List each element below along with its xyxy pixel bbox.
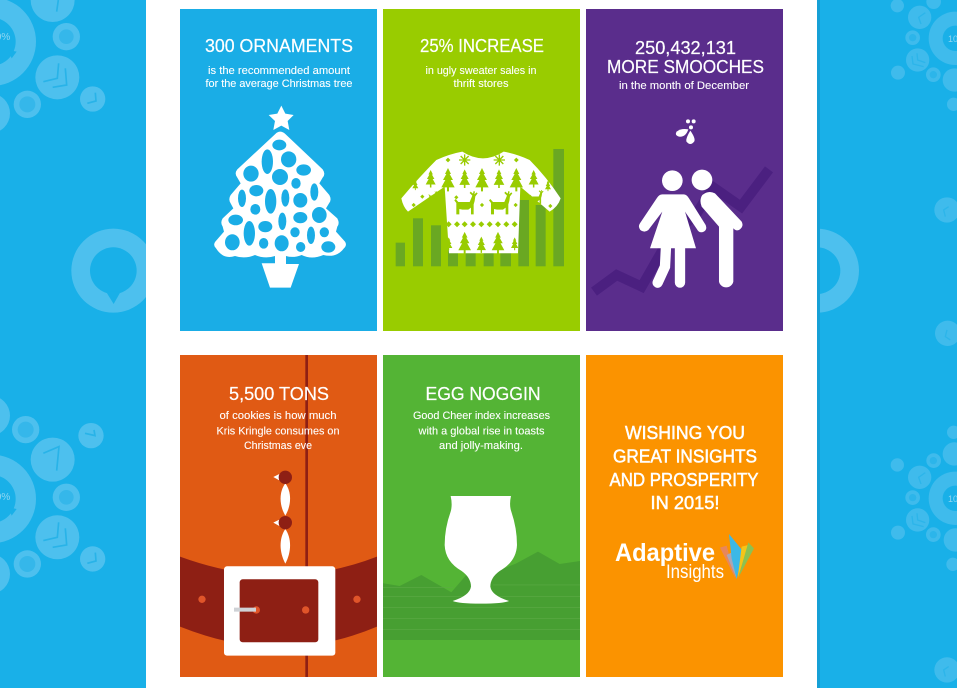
logo: adaptive insights: Insights: [666, 562, 724, 583]
heading: wishing you: WISHING YOU: [625, 423, 745, 443]
logo: adaptive insights: Adaptive: [615, 539, 715, 567]
heading: wishing you: [610, 423, 758, 513]
text: cookies description: [216, 410, 340, 452]
panel: 25% increase: [383, 9, 580, 331]
bar chart: [396, 149, 564, 266]
icon: ugly sweater: [401, 152, 561, 254]
text: sweater description: thrift stores: [454, 78, 509, 90]
icon: belt: [180, 557, 377, 648]
icon: glass: [445, 496, 517, 604]
background pattern: left bubbles: [0, 0, 155, 594]
text: good cheer description: with a global rise in toasts: [417, 426, 545, 438]
panel: 5,500 tons: [180, 355, 377, 677]
text: ornaments description: for the average Christmas tree: [206, 78, 352, 90]
text: cookies description: Kris Kringle consumes on: [216, 426, 340, 438]
heading: 250,432,131 more smooches: [607, 38, 764, 77]
icon: christmas tree: [214, 106, 346, 288]
icon: kiss mark: [676, 119, 696, 144]
text: smooches description: in the month of December: [619, 80, 749, 92]
panel: 300 ornaments: [180, 9, 377, 331]
heading: wishing you: GREAT INSIGHTS: [613, 446, 757, 466]
text: good cheer description: Good Cheer index increases: [413, 410, 550, 422]
text: good cheer description: and jolly-making.: [439, 440, 523, 452]
logo: adaptive insights: [615, 534, 754, 583]
heading: 250,432,131 more smooches: 250,432,131: [635, 38, 736, 58]
heading: wishing you: IN 2015!: [650, 493, 720, 513]
panel: wishing you: [586, 355, 783, 677]
heading: egg noggin: EGG NOGGIN: [426, 384, 540, 404]
white page: [146, 0, 817, 688]
text: sweater description: in ugly sweater sales in: [426, 65, 536, 77]
background pattern: right bubbles: [775, 0, 957, 683]
icon: buckle: [198, 566, 361, 656]
text: sweater description: [426, 65, 536, 90]
area chart: hills: [383, 552, 580, 640]
text: ornaments description: is the recommended amount: [208, 65, 350, 77]
heading: 300 ornaments: 300 ORNAMENTS: [205, 36, 353, 56]
line chart: [594, 169, 769, 292]
text: cookies description: of cookies is how much: [220, 410, 336, 422]
text: good cheer description: [413, 410, 550, 452]
text: ornaments description: [206, 65, 352, 90]
icon: buttons: [273, 471, 292, 564]
panel: egg noggin: [383, 355, 580, 677]
panel: more smooches: [586, 9, 783, 331]
heading: 5,500 tons: 5,500 TONS: [229, 384, 329, 404]
heading: wishing you: AND PROSPERITY: [610, 470, 758, 490]
heading: 25% increase: 25% INCREASE: [420, 36, 544, 56]
icon: kissing couple: [639, 170, 743, 287]
page edge shadow: [817, 0, 820, 688]
heading: 250,432,131 more smooches: MORE SMOOCHES: [607, 57, 764, 77]
santa suit illustration: [180, 355, 377, 677]
text: cookies description: Christmas eve: [244, 440, 312, 452]
